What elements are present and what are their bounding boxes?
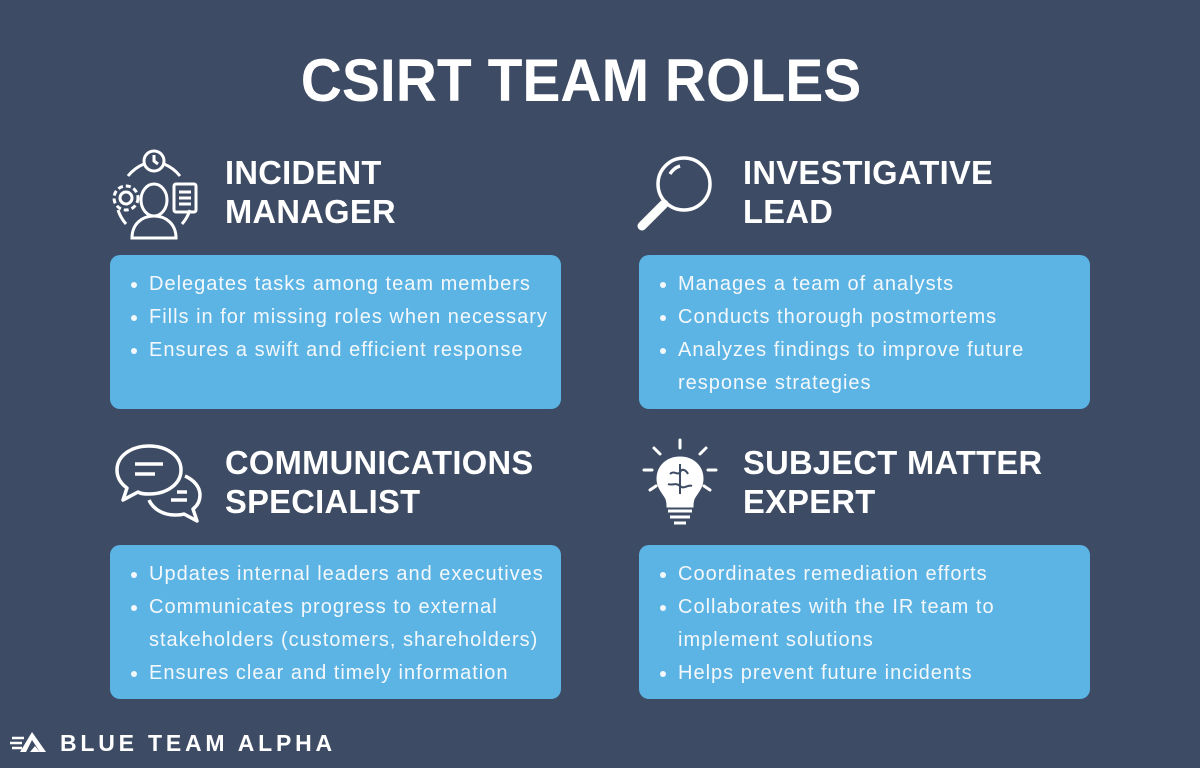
title: CSIRT TEAM ROLES	[301, 47, 861, 114]
panel: subject matter expert: Collaborates with the IR team to implement solutions	[678, 596, 995, 651]
heading: investigative lead: LEAD	[743, 193, 833, 230]
icon: lightbulb brain	[642, 438, 718, 524]
panel: investigative lead: Conducts thorough postmortems	[678, 306, 997, 328]
icon: chat bubbles	[115, 444, 202, 523]
panel: investigative lead: Manages a team of analysts	[678, 273, 954, 295]
heading: communications specialist: SPECIALIST	[225, 483, 420, 520]
panel: investigative lead: Analyzes findings to improve future response strategies	[678, 339, 1024, 394]
heading: investigative lead: INVESTIGATIVE	[743, 154, 993, 191]
heading: incident manager	[225, 154, 396, 230]
heading: subject matter expert: SUBJECT MATTER	[743, 444, 1042, 481]
panel: communications specialist: Communicates progress to external stakeholders (customers, shareholders)	[149, 596, 538, 651]
panel: incident manager	[110, 255, 561, 409]
icon: magnifier	[638, 156, 712, 230]
logo: blue team alpha: BLUE TEAM ALPHA	[60, 730, 336, 756]
panel: communications specialist: Updates internal leaders and executives	[149, 563, 544, 585]
heading: communications specialist: COMMUNICATIONS	[225, 444, 533, 481]
heading: communications specialist	[225, 444, 533, 520]
heading: incident manager: MANAGER	[225, 193, 396, 230]
panel: subject matter expert	[639, 545, 1090, 699]
panel: investigative lead	[639, 255, 1090, 409]
heading: subject matter expert	[743, 444, 1042, 520]
heading: incident manager: INCIDENT	[225, 154, 382, 191]
heading: subject matter expert: EXPERT	[743, 483, 876, 520]
heading: investigative lead	[743, 154, 993, 230]
panel: incident manager: Fills in for missing roles when necessary	[149, 306, 548, 328]
icon: incident manager	[112, 150, 198, 240]
panel: incident manager: Delegates tasks among team members	[149, 273, 531, 295]
panel: communications specialist	[110, 545, 561, 699]
panel: incident manager: Ensures a swift and efficient response	[149, 339, 523, 361]
panel: subject matter expert: Coordinates remediation efforts	[678, 563, 988, 585]
panel: communications specialist: Ensures clear and timely information	[149, 662, 508, 684]
panel: subject matter expert: Helps prevent future incidents	[678, 662, 973, 684]
